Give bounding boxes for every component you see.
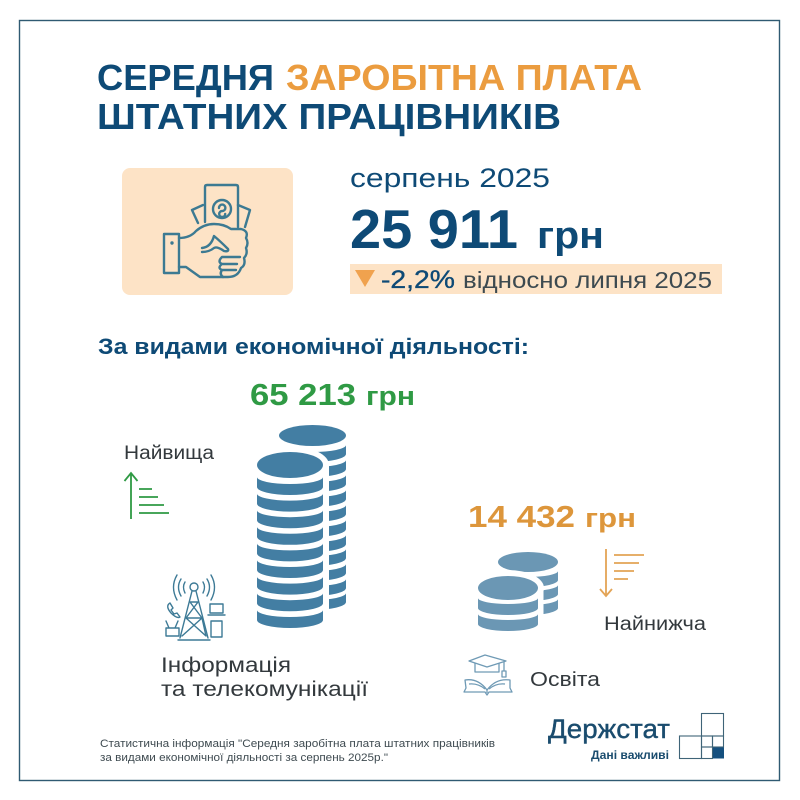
lowest value (468, 499, 636, 534)
icon: arrow up with bars (124, 473, 169, 519)
icon: arrow down with bars (600, 549, 644, 596)
title: СЕРЕДНЯ (97, 57, 274, 98)
date label: серпень 2025 (350, 163, 550, 193)
category: telecom: та телекомунікації (161, 678, 368, 701)
highest value: 65 213 (250, 377, 356, 412)
lowest value: 14 432 (468, 499, 575, 534)
main value (350, 198, 604, 260)
title: ЗАРОБІТНА ПЛАТА (286, 57, 642, 98)
small coin stacks (472, 552, 558, 648)
source note (100, 738, 495, 764)
main value: грн (537, 215, 604, 257)
lowest value: грн (585, 503, 636, 533)
main value: 25 911 (350, 198, 518, 260)
logo: Держстат: Держстат (548, 714, 670, 744)
icon: hand holding money (122, 168, 293, 295)
logo: Держстат (548, 714, 724, 762)
change badge: відносно липня 2025 (463, 267, 712, 293)
icon: graduation cap and book (464, 655, 512, 695)
category: telecom (161, 654, 368, 701)
highest value: грн (366, 381, 415, 411)
logo: Держстат: Дані важливі (591, 750, 669, 762)
change badge: -2,2% (381, 266, 455, 294)
tall coin stacks (251, 425, 346, 650)
section heading: За видами економічної діяльності: (98, 334, 529, 359)
title: ШТАТНИХ ПРАЦІВНИКІВ (97, 96, 561, 137)
category: education: Освіта (530, 669, 601, 691)
category: telecom: Інформація (161, 654, 291, 677)
highest value (250, 377, 415, 412)
icon: telecom tower (166, 575, 225, 640)
source note: за видами економічної діяльності за серпень 2025р." (100, 752, 388, 764)
title (97, 57, 642, 137)
change badge (350, 264, 722, 294)
label: lowest: Найнижча (604, 614, 706, 635)
source note: Статистична інформація "Середня заробітна плата штатних працівників (100, 738, 495, 750)
label: highest: Найвища (124, 443, 214, 464)
